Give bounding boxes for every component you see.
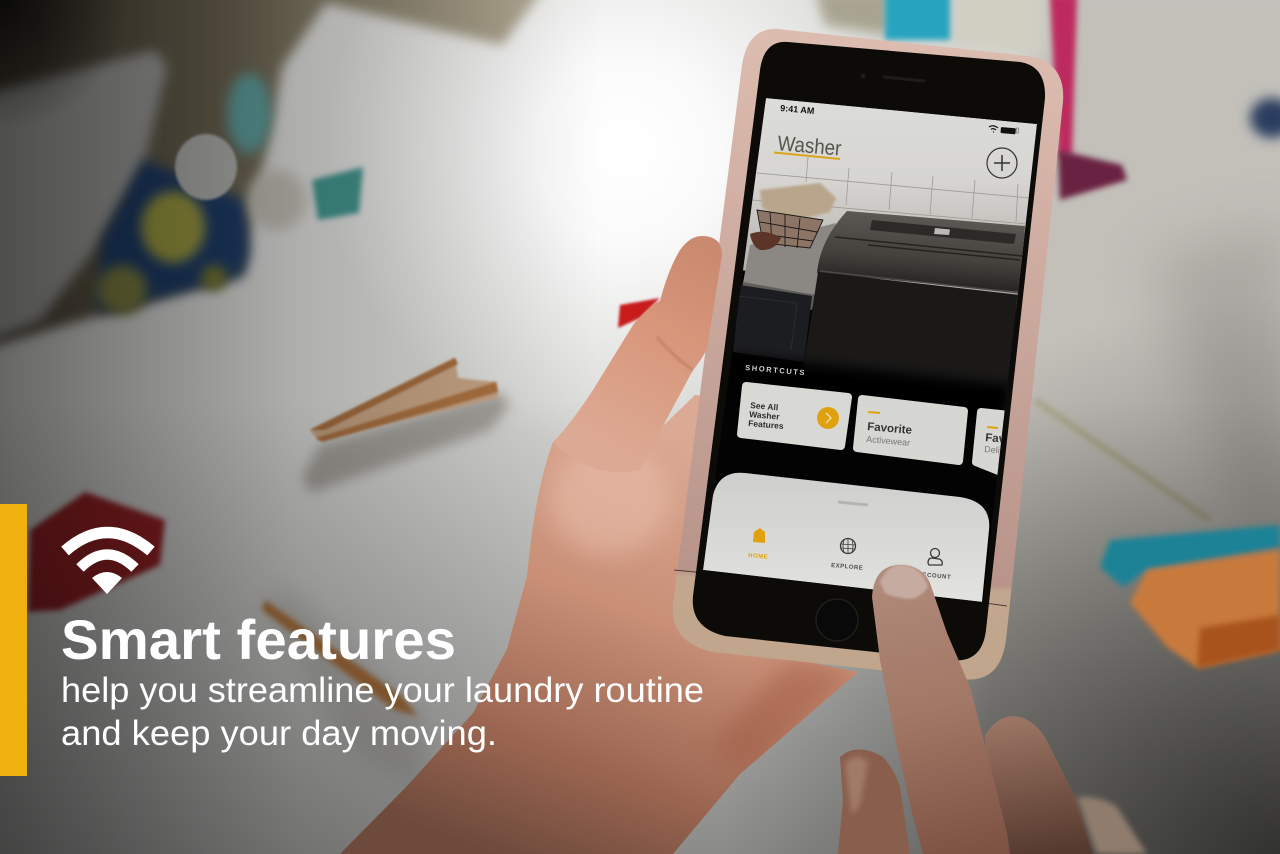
subheading	[61, 670, 704, 753]
holding hand	[340, 395, 860, 854]
nav: explore: EXPLORE	[831, 563, 863, 572]
counter	[743, 223, 836, 295]
right side backdrop	[950, 0, 1280, 854]
nav: account	[923, 548, 951, 579]
plus button	[987, 148, 1017, 178]
wifi status icon	[989, 126, 998, 132]
sleeve	[1077, 797, 1147, 854]
shortcut card: partial: Fav	[985, 432, 1006, 446]
right side fabric	[1100, 525, 1280, 668]
fade to black	[740, 352, 1008, 410]
other fingers	[838, 716, 1147, 854]
shortcut card: see all	[741, 386, 848, 446]
tile lines	[752, 157, 1030, 224]
shortcut card: see all: Features	[748, 418, 784, 431]
shortcut card: favorite: Activewear	[866, 434, 911, 448]
app screen	[700, 90, 1040, 610]
battery status icon	[1000, 127, 1018, 134]
shortcut card: see all: See All	[750, 400, 779, 412]
washer seam	[835, 237, 1022, 260]
time: 9:41 AM	[780, 103, 815, 116]
shortcut card: see all: Washer	[749, 409, 781, 422]
washer lid	[817, 211, 1025, 292]
icon: wifi	[65, 532, 151, 594]
index finger	[872, 565, 1010, 854]
shortcut card: partial	[976, 412, 1010, 474]
accent bar	[0, 504, 27, 776]
pillow	[0, 50, 167, 345]
nav: home	[748, 528, 768, 561]
lower cabinet	[733, 285, 812, 362]
control panel	[870, 220, 1016, 244]
dark backdrop behind table	[0, 0, 550, 350]
washer front	[804, 272, 1018, 390]
home button	[816, 599, 858, 641]
red clip	[618, 298, 660, 328]
nav: account: ACCOUNT	[917, 572, 951, 581]
pale block	[262, 590, 422, 790]
middle finger	[985, 716, 1093, 854]
top props	[885, 0, 1280, 200]
nav: home: HOME	[748, 553, 768, 561]
heading: Smart features	[61, 608, 456, 671]
shortcut card: partial: Deli	[984, 444, 1000, 455]
bottom sheet	[703, 473, 989, 602]
shortcut card: favorite: Favorite	[867, 421, 912, 437]
tan stick	[1035, 400, 1210, 520]
smartphone	[673, 29, 1063, 680]
bowl	[750, 232, 781, 250]
subheading: and keep your day moving.	[61, 713, 497, 753]
screen title: Washer	[777, 132, 842, 161]
clothespin shadow	[302, 392, 510, 493]
blurred toy	[97, 73, 363, 315]
thumb	[553, 236, 722, 472]
subheading: help you streamline your laundry routine	[61, 670, 704, 710]
low finger	[838, 750, 910, 854]
tan clothespin	[310, 358, 498, 442]
shortcut card: favorite	[857, 399, 964, 461]
earpiece	[884, 77, 924, 81]
red fabric	[28, 492, 165, 612]
wall	[740, 98, 1037, 310]
phone face	[693, 42, 1045, 660]
nav: explore	[831, 538, 863, 572]
phone case	[673, 29, 1063, 680]
basket	[757, 210, 823, 248]
towels	[760, 183, 836, 222]
shortcuts label: SHORTCUTS	[745, 363, 806, 377]
